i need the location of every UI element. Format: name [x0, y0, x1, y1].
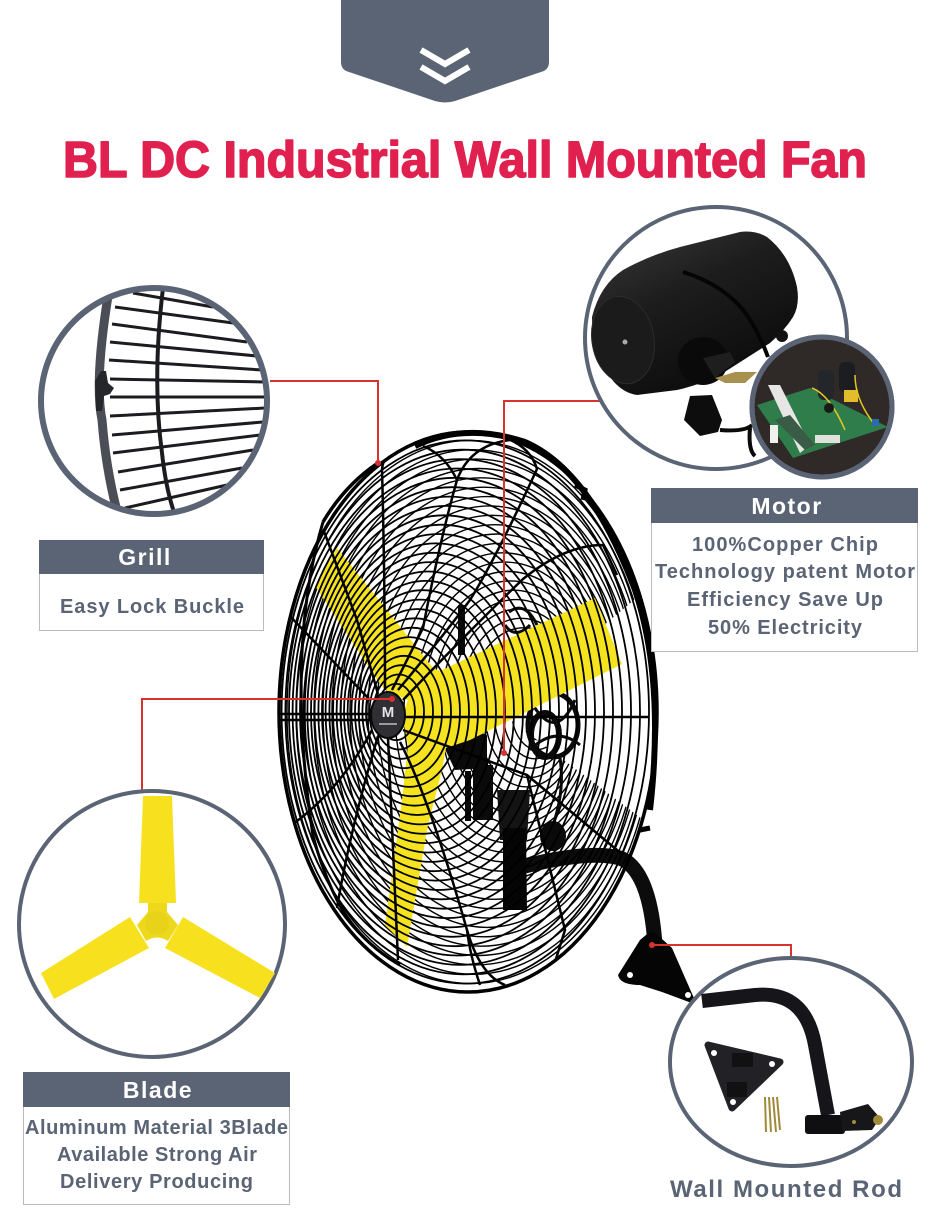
- panel: grill label: [39, 540, 264, 630]
- panel: grill detail circle: [41, 288, 267, 515]
- fan product illustration: [277, 432, 697, 1005]
- panel: blade label: [23, 1072, 290, 1204]
- panel: blade label: Available Strong Air: [57, 1144, 257, 1166]
- panel: motor detail circle: [585, 207, 892, 477]
- wall mounted rod label: Wall Mounted Rod: [670, 1176, 902, 1203]
- connector: grill: [270, 381, 381, 466]
- outer rim: [279, 432, 657, 992]
- bolts: [765, 1097, 780, 1132]
- hub with logo: [371, 692, 405, 738]
- lock buckle: [95, 371, 114, 411]
- motor body: [585, 232, 798, 456]
- panel: wall rod detail circle: [670, 958, 912, 1166]
- rod tube and clamp: [702, 995, 883, 1134]
- panel: blade label: Aluminum Material 3Blade: [25, 1117, 288, 1139]
- three-blade propeller: [41, 796, 275, 999]
- triangular wall plate: [708, 1045, 780, 1108]
- yellow blades: [315, 548, 622, 947]
- grill frame band: [99, 290, 118, 515]
- front grill rings: [282, 440, 649, 984]
- control board inset: [752, 337, 892, 477]
- connector: motor: [501, 401, 603, 756]
- panel: motor label: [651, 488, 918, 652]
- connector: blade: [142, 696, 395, 790]
- motor seen through grill: [443, 605, 580, 910]
- panel: motor label: Motor: [751, 493, 823, 519]
- panel: motor label: Efficiency Save Up: [687, 589, 883, 611]
- connector: wall rod: [649, 942, 791, 957]
- grill spokes: [277, 436, 648, 985]
- grill wires: [109, 288, 265, 515]
- rear grill rings: [287, 440, 654, 984]
- panel: grill label: Grill: [118, 544, 172, 570]
- hub with logo: M: [382, 704, 394, 721]
- panel: blade label: Blade: [123, 1077, 193, 1103]
- panel: motor label: 100%Copper Chip: [692, 534, 878, 556]
- panel: blade label: Delivery Producing: [60, 1171, 253, 1193]
- panel: blade detail circle: [19, 791, 285, 1057]
- panel: grill label: Easy Lock Buckle: [60, 596, 244, 618]
- top tab with double chevron: [341, 0, 549, 102]
- panel: motor label: Technology patent Motor: [655, 561, 915, 583]
- panel: motor label: 50% Electricity: [708, 617, 863, 639]
- wall arm and mounting bracket: [525, 855, 697, 1005]
- title: BL DC Industrial Wall Mounted Fan: [63, 131, 867, 188]
